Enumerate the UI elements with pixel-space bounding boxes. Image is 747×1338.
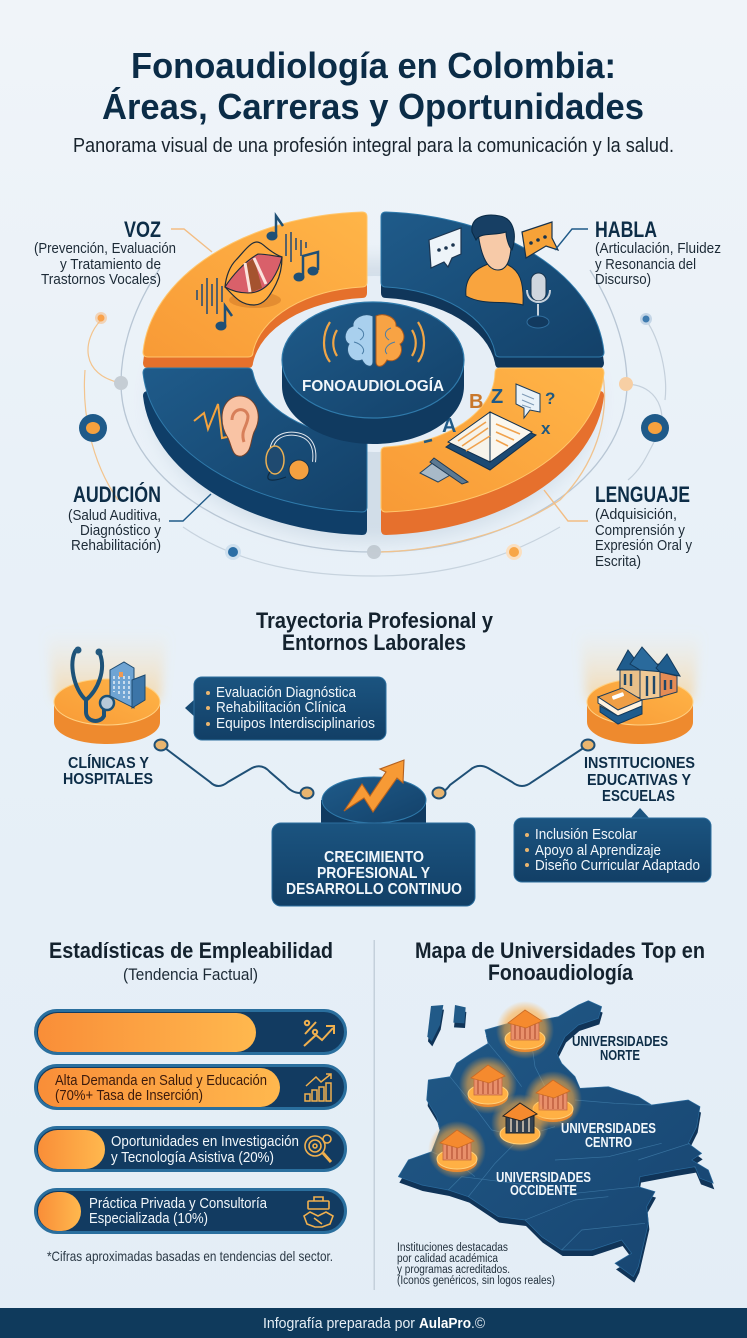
bar: demand: Alta Demanda en Salud y Educación bbox=[55, 1072, 267, 1089]
callout: clinics bbox=[185, 677, 386, 740]
label: AUDICIÓN: (Salud Auditiva, bbox=[68, 507, 161, 524]
bar: 70 percent fill bbox=[36, 1010, 346, 1054]
label: schools: INSTITUCIONES bbox=[584, 755, 695, 772]
label: VOZ: VOZ bbox=[124, 217, 161, 242]
panel: ring segment AUDICIÓN bbox=[143, 368, 367, 535]
panel: ring segment VOZ bbox=[143, 212, 367, 368]
map note: Instituciones destacadas bbox=[397, 1242, 508, 1254]
label: centre universities: UNIVERSIDADES bbox=[561, 1121, 656, 1137]
callout: schools: Inclusión Escolar bbox=[535, 826, 637, 843]
icon: person speaking with bubbles and microphone bbox=[429, 215, 558, 328]
icon: university pin centre bbox=[491, 1094, 549, 1152]
label: AUDICIÓN: Rehabilitación) bbox=[71, 537, 161, 554]
title: Áreas, Carreras y Oportunidades bbox=[102, 86, 644, 127]
panel: clinics platform bbox=[46, 630, 168, 744]
label: west universities: OCCIDENTE bbox=[510, 1183, 577, 1199]
footer: .© bbox=[471, 1316, 485, 1332]
icon: brain with sound waves bbox=[324, 315, 424, 366]
callout: clinics: Rehabilitación Clínica bbox=[216, 699, 347, 716]
footnote: *Cifras aproximadas basadas en tendencias del sector. bbox=[47, 1248, 333, 1264]
panel: professional growth: CRECIMIENTO bbox=[324, 849, 424, 866]
label: AUDICIÓN: Diagnóstico y bbox=[80, 522, 161, 539]
icon: growth arrow bbox=[344, 760, 404, 812]
label: HABLA bbox=[555, 217, 721, 288]
bar: research: y Tecnología Asistiva (20%) bbox=[111, 1149, 274, 1166]
label: LENGUAJE: Expresión Oral y bbox=[595, 537, 692, 554]
heading: mapa: Mapa de Universidades Top en bbox=[415, 938, 705, 963]
heading: estadísticas: (Tendencia Factual) bbox=[123, 965, 258, 984]
label: VOZ: y Tratamiento de bbox=[60, 256, 161, 273]
heading: trayectoria: Trayectoria Profesional y bbox=[256, 608, 494, 633]
panel: central disc FONOAUDIOLOGÍA bbox=[282, 302, 464, 444]
label: HABLA: HABLA bbox=[595, 217, 657, 242]
icon: book letters and pencil: B bbox=[469, 391, 483, 413]
bar: research: Oportunidades en Investigación bbox=[111, 1133, 299, 1150]
heading: mapa: Fonoaudiología bbox=[488, 960, 634, 985]
panel: central disc FONOAUDIOLOGÍA: FONOAUDIOLOGÍA bbox=[302, 376, 444, 395]
label: clinics bbox=[63, 753, 153, 788]
label: VOZ bbox=[34, 217, 212, 288]
icon: university pin southwest bbox=[428, 1121, 486, 1179]
label: AUDICIÓN bbox=[68, 482, 211, 554]
heading: estadísticas: Estadísticas de Empleabilidad bbox=[49, 938, 333, 963]
label: clinics: CLÍNICAS Y bbox=[68, 753, 149, 772]
map note bbox=[397, 1242, 555, 1287]
icon: book letters and pencil: x bbox=[541, 419, 551, 438]
title: Fonoaudiología en Colombia: bbox=[131, 45, 616, 86]
label: schools: ESCUELAS bbox=[602, 788, 675, 805]
heading: estadísticas bbox=[49, 938, 333, 984]
heading: trayectoria: Entornos Laborales bbox=[282, 630, 466, 655]
callout: schools: Diseño Curricular Adaptado bbox=[535, 857, 700, 874]
label: AUDICIÓN: AUDICIÓN bbox=[73, 482, 161, 507]
label: centre universities bbox=[561, 1121, 656, 1151]
heading: trayectoria bbox=[256, 608, 494, 655]
icon: percent growth bbox=[304, 1021, 334, 1046]
ring hole highlight bbox=[246, 276, 502, 452]
bar: private practice: Especializada (10%) bbox=[89, 1210, 208, 1227]
bar: demand: (70%+ Tasa de Inserción) bbox=[55, 1087, 203, 1104]
label: LENGUAJE: LENGUAJE bbox=[595, 482, 690, 507]
subtitle: Panorama visual de una profesión integral para la comunicación y la salud. bbox=[73, 135, 674, 157]
callout: schools bbox=[514, 808, 711, 882]
label: HABLA: Discurso) bbox=[595, 271, 651, 288]
map note: por calidad académica bbox=[397, 1253, 499, 1265]
label: LENGUAJE: (Adquisición, bbox=[595, 506, 677, 523]
label: north universities bbox=[572, 1034, 668, 1064]
icon: lips and music notes bbox=[197, 216, 318, 330]
panel: professional growth: PROFESIONAL Y bbox=[317, 865, 430, 882]
panel: ring segment LENGUAJE bbox=[381, 368, 604, 535]
label: centre universities: CENTRO bbox=[585, 1135, 632, 1151]
icon: school and books bbox=[598, 647, 680, 724]
icon: bar chart bbox=[305, 1074, 331, 1101]
icon: stethoscope and hospital bbox=[72, 646, 145, 721]
icon: ear with sound wave and headphones bbox=[194, 396, 314, 480]
icon: magnifier with gear bbox=[305, 1135, 331, 1162]
label: VOZ: (Prevención, Evaluación bbox=[34, 240, 176, 257]
vertical divider bbox=[374, 940, 375, 1290]
decorative orbit with nodes bbox=[79, 268, 669, 576]
bar: research bbox=[36, 1128, 346, 1170]
footer: AulaPro bbox=[419, 1316, 471, 1332]
label: schools: EDUCATIVAS Y bbox=[587, 772, 691, 789]
bar: demand bbox=[36, 1066, 346, 1108]
bar: private practice: Práctica Privada y Consultoría bbox=[89, 1195, 268, 1212]
ring shadow bbox=[152, 258, 596, 542]
callout: clinics: Equipos Interdisciplinarios bbox=[216, 715, 375, 732]
map note: (Iconos genéricos, sin logos reales) bbox=[397, 1275, 555, 1287]
label: VOZ: Trastornos Vocales) bbox=[41, 271, 161, 288]
label: LENGUAJE: Escrita) bbox=[595, 553, 641, 570]
map of Colombia bbox=[398, 1001, 714, 1283]
icon: briefcase and handshake bbox=[304, 1197, 333, 1227]
icon: book letters and pencil: Z bbox=[491, 386, 503, 408]
callout: schools: Apoyo al Aprendizaje bbox=[535, 842, 661, 859]
label: north universities: NORTE bbox=[600, 1048, 640, 1064]
icon: book letters and pencil bbox=[420, 384, 555, 484]
panel: ring segment HABLA bbox=[381, 212, 604, 368]
connector lines bbox=[154, 740, 594, 798]
icon: university pin west bbox=[459, 1056, 517, 1114]
heading: mapa bbox=[415, 938, 705, 985]
callout: clinics: Evaluación Diagnóstica bbox=[216, 684, 357, 701]
panel: schools platform bbox=[579, 630, 701, 744]
label: HABLA: y Resonancia del bbox=[595, 256, 696, 273]
map note: y programas acreditados. bbox=[397, 1264, 510, 1276]
panel: professional growth: DESARROLLO CONTINUO bbox=[286, 881, 462, 898]
label: LENGUAJE: Comprensión y bbox=[595, 522, 685, 539]
label: schools bbox=[584, 755, 695, 805]
label: west universities bbox=[496, 1170, 591, 1199]
footer bbox=[0, 1308, 747, 1338]
label: HABLA: (Articulación, Fluidez bbox=[595, 240, 721, 257]
icon: book letters and pencil: A bbox=[442, 415, 456, 437]
footer: Infografía preparada por bbox=[263, 1316, 415, 1332]
icon: university pin north bbox=[496, 1001, 554, 1059]
bar: private practice bbox=[36, 1190, 346, 1232]
icon: book letters and pencil: ? bbox=[545, 389, 555, 408]
icon: university pin northeast bbox=[524, 1071, 582, 1129]
panel: professional growth bbox=[272, 760, 475, 906]
label: clinics: HOSPITALES bbox=[63, 771, 153, 788]
label: LENGUAJE bbox=[544, 482, 692, 570]
title bbox=[102, 45, 644, 127]
label: west universities: UNIVERSIDADES bbox=[496, 1170, 591, 1186]
label: north universities: UNIVERSIDADES bbox=[572, 1034, 668, 1050]
